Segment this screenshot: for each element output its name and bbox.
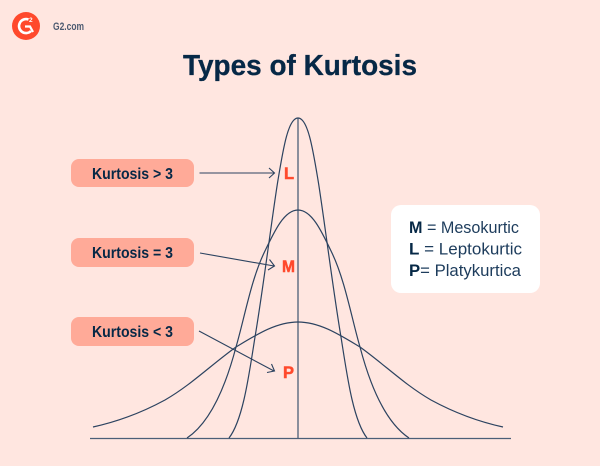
curve: mesokurtic left [187,210,298,438]
legend line P: P= Platykurtica [409,262,522,280]
marker M: M [282,258,295,276]
label: kurtosis greater than 3 [71,159,194,187]
icon: G2 logo: 2 [29,17,33,24]
curve: leptokurtic left [229,118,298,438]
center axis [297,118,299,438]
marker P: P [283,364,294,382]
baseline axis [90,438,511,440]
arrow: to L [200,168,274,178]
brand label: G2.com [53,21,84,33]
arrow: to M [200,253,274,270]
curve: platykurtic right [298,322,503,427]
distribution curves chart [90,118,511,438]
label: kurtosis less than 3 [71,317,194,346]
label: kurtosis equal to 3: Kurtosis = 3 [92,245,173,262]
legend line M: M = Mesokurtic [409,219,519,237]
curve: mesokurtic right [298,210,409,438]
legend line L: L = Leptokurtic [409,240,522,258]
label: kurtosis greater than 3: Kurtosis > 3 [92,166,173,183]
title: Types of Kurtosis [183,50,417,82]
arrow: to P [199,331,274,372]
marker L: L [284,165,294,183]
curve: platykurtic left [93,322,298,427]
label: kurtosis equal to 3 [71,238,194,267]
label: kurtosis less than 3: Kurtosis < 3 [92,324,173,341]
legend panel [391,205,540,293]
icon: G2 logo [12,12,40,40]
curve: leptokurtic right [298,118,367,438]
